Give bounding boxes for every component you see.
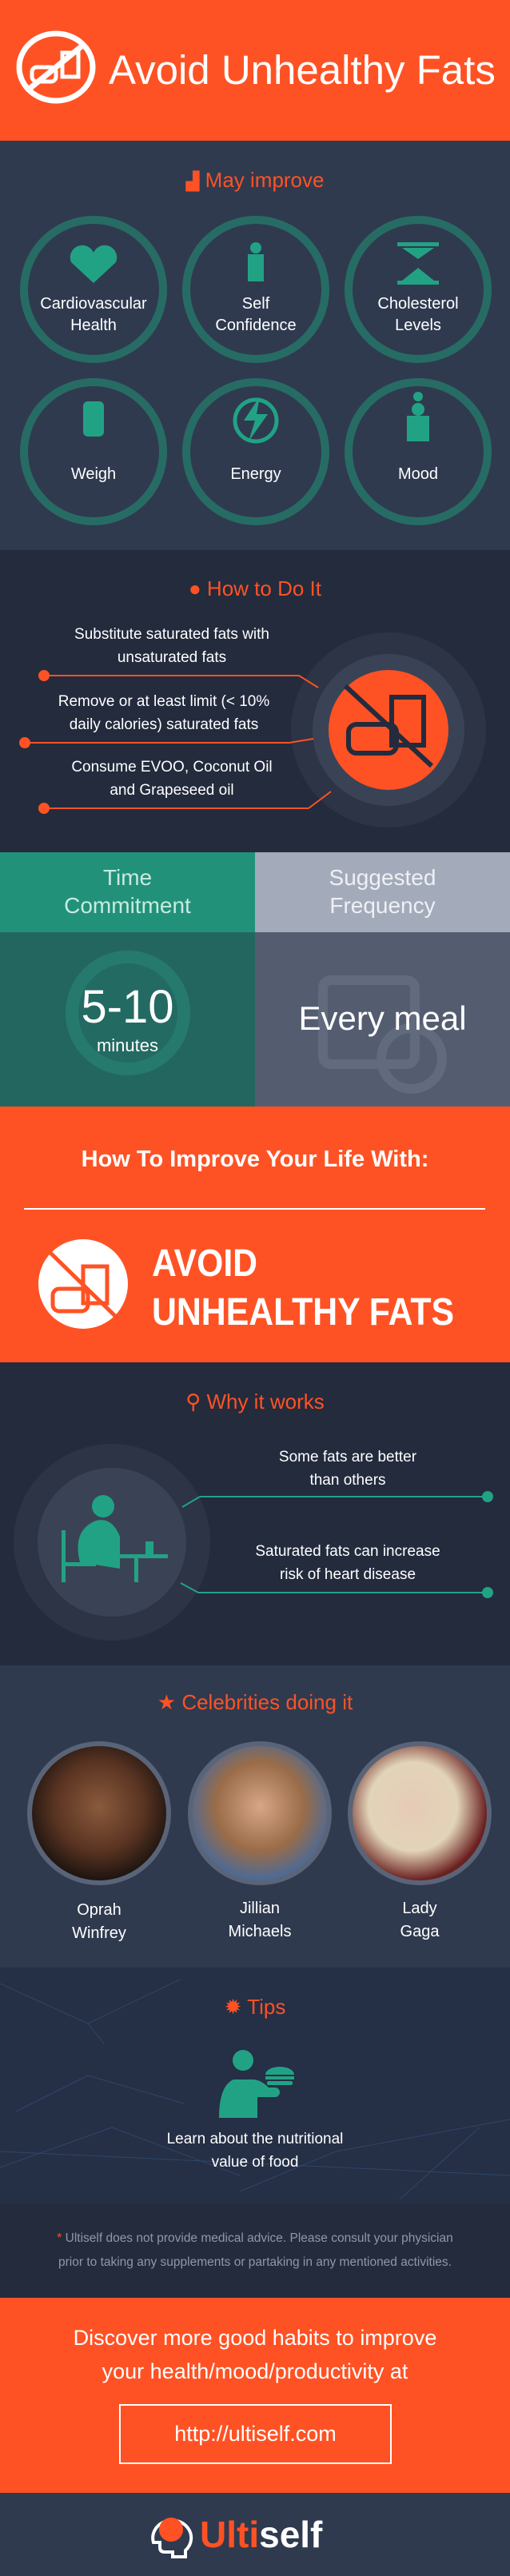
panel: may improve: Mood	[398, 465, 438, 483]
time value	[0, 932, 255, 1107]
panel: time and frequency	[0, 852, 510, 1107]
time value: minutes	[97, 1035, 158, 1055]
frequency header	[255, 852, 510, 932]
icon: no fast food	[16, 30, 96, 104]
disclaimer	[0, 2204, 510, 2298]
panel: celebrities: Gaga	[400, 1923, 439, 1940]
icon: person with burger	[219, 2050, 294, 2118]
panel: may improve: Confidence	[215, 317, 297, 334]
footer	[0, 2493, 510, 2576]
frequency value	[255, 932, 510, 1107]
panel: why it works	[0, 1362, 510, 1665]
panel: celebrities: Michaels	[229, 1923, 291, 1940]
names: Oprah	[77, 1901, 122, 1919]
panel: may improve: Energy	[230, 465, 281, 483]
tip text: value of food	[212, 2154, 298, 2171]
cta text	[74, 2326, 436, 2383]
title: Avoid Unhealthy Fats	[109, 47, 496, 93]
panel: celebrities: Lady	[402, 1900, 437, 1917]
panel: celebrities	[0, 1665, 510, 1968]
banner heading: How To Improve Your Life With:	[82, 1146, 428, 1172]
benefit circles	[20, 216, 492, 525]
panel: how to do it	[0, 550, 510, 852]
heading: how to do it: ● How to Do It	[189, 576, 321, 600]
tip text: Learn about the nutritional	[167, 2131, 343, 2147]
logo: Ultiself	[200, 2514, 322, 2555]
illustration: no fast food circle	[19, 632, 486, 827]
heading: why it works: ⚲ Why it works	[185, 1390, 325, 1414]
heading: celebrities: ★ Celebrities doing it	[157, 1690, 353, 1714]
heading: tips: ✹ Tips	[225, 1995, 285, 2019]
logo	[151, 2514, 323, 2558]
panel: tips	[0, 1968, 510, 2204]
time header: Commitment	[64, 893, 191, 918]
panel: how to do it: Remove or at least limit (< 10%	[58, 693, 269, 710]
cta text: your health/mood/productivity at	[102, 2359, 408, 2383]
celebrity photos	[27, 1741, 492, 1885]
heading: may improve: ▟ May improve	[186, 168, 324, 192]
banner title	[152, 1242, 454, 1330]
panel: why it works: risk of heart disease	[280, 1566, 416, 1583]
url button	[119, 2404, 392, 2464]
call to action	[0, 2298, 510, 2493]
panel: celebrities: Jillian	[240, 1900, 280, 1917]
tip list: Substitute saturated fats with	[74, 626, 269, 643]
panel: how to do it: Consume EVOO, Coconut Oil	[71, 759, 273, 776]
labels: Cardiovascular	[40, 295, 147, 313]
panel: how to improve banner	[0, 1107, 510, 1362]
header	[0, 0, 510, 141]
tip list	[74, 626, 269, 666]
names: Winfrey	[72, 1924, 126, 1942]
frequency header: Suggested	[329, 865, 436, 890]
disclaimer: prior to taking any supplements or partaking in any mentioned activities.	[58, 2255, 452, 2269]
disclaimer: * Ultiself does not provide medical advice. Please consult your physician	[57, 2231, 453, 2245]
panel: how to do it: daily calories) saturated fats	[70, 716, 258, 733]
labels: Health	[70, 317, 117, 334]
panel: may improve: Cholesterol	[377, 295, 459, 313]
cta text: Discover more good habits to improve	[74, 2326, 436, 2350]
reasons: than others	[309, 1472, 386, 1489]
names	[72, 1901, 126, 1942]
time header: Time	[103, 865, 152, 890]
tip list: unsaturated fats	[118, 649, 226, 666]
icon: no fast food white	[38, 1239, 128, 1329]
time value: 5-10	[81, 981, 174, 1033]
banner title: AVOID	[152, 1242, 257, 1285]
panel: may improve: Weigh	[71, 465, 116, 483]
panel: how to do it: and Grapeseed oil	[110, 782, 234, 799]
panel: why it works: Saturated fats can increase	[255, 1543, 440, 1560]
panel: may improve: Levels	[395, 317, 441, 334]
panel: may improve	[0, 141, 510, 550]
illustration: person eating	[14, 1444, 493, 1641]
labels	[40, 295, 147, 334]
reasons	[279, 1449, 416, 1489]
frequency header: Frequency	[329, 893, 436, 918]
panel: may improve: Self	[242, 295, 269, 313]
frequency value: Every meal	[298, 999, 467, 1037]
tip text	[167, 2131, 343, 2171]
reasons: Some fats are better	[279, 1449, 416, 1465]
url button: http://ultiself.com	[174, 2422, 337, 2446]
time header	[0, 852, 255, 932]
